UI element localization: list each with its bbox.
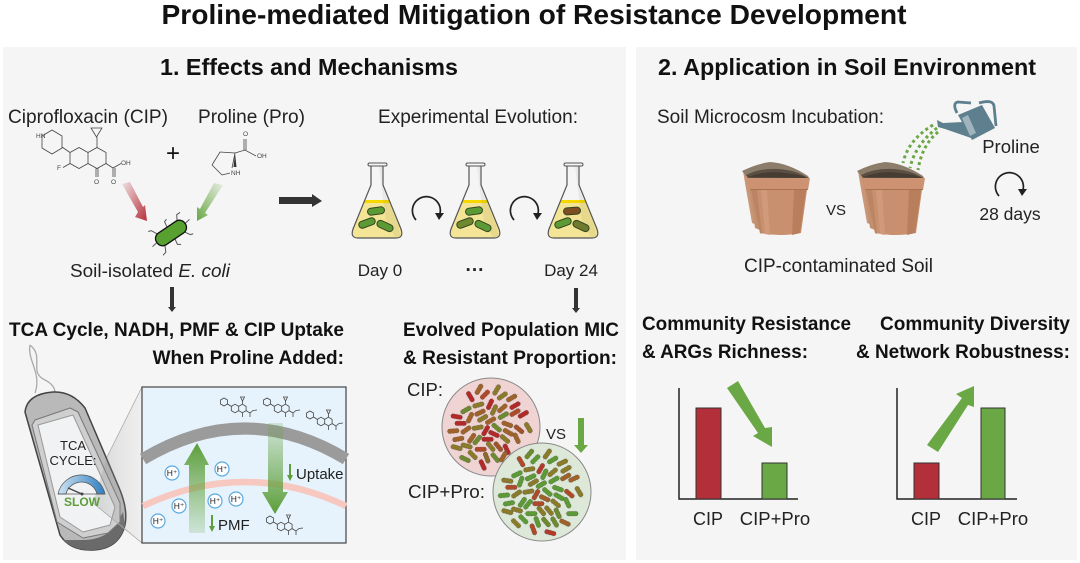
flask: middle [450,163,500,238]
arrow: cycle [412,197,444,220]
label: experimental evolution: Experimental Evolution: [378,107,578,128]
arrow: decrease [727,381,772,447]
heading: ARGs richness: & ARGs Richness: [642,342,808,363]
icon: ciprofloxacin molecule: F [57,165,61,172]
label: PMF [209,515,250,534]
label: PMF: PMF [218,517,250,534]
population: CIP [442,378,540,476]
zoom wedge [93,387,142,543]
label: day 24: Day 24 [544,261,598,280]
label: proline: Proline [982,136,1040,157]
population: CIP+Pro [493,443,591,541]
CIP molecules [220,397,343,535]
heading: TCA cycle: TCA Cycle, NADH, PMF & CIP Uptake [9,320,344,341]
arrow: to evolved population [572,288,580,313]
label: uptake: Uptake [296,466,344,483]
arrow: to TCA heading [168,287,176,312]
heading: network robustness: & Network Robustness: [856,342,1070,363]
arrow: cycle [510,197,542,220]
arrow: uptake down [262,423,288,514]
icon: proline molecule: O [243,131,248,138]
bar chart: diversity [897,386,1028,529]
icon: ciprofloxacin molecule: HN [36,133,46,140]
label: CIP [693,509,723,529]
panel: membrane zoom [142,387,346,543]
heading: effects and mechanisms: 1. Effects and Mechanisms [160,54,458,80]
label: CIP+Pro: CIP+Pro: [408,481,485,502]
arrow: increase [927,386,974,452]
icon: proline molecule: OH [257,153,267,160]
icon: pot with proline [857,162,925,235]
label: CIP [911,509,941,529]
heading: community diversity: Community Diversity [880,314,1070,335]
icon: E. coli bacterium [144,209,198,258]
label: proline: Proline (Pro) [198,107,305,128]
label: CIP: CIP: [407,379,443,400]
bar chart: resistance [679,381,810,529]
arrow: decrease [574,418,588,453]
label: soil-isolated E. coli: Soil-isolated E. coli [70,260,231,281]
label: vs: VS [826,202,846,219]
H+ ions [151,462,243,528]
icon: ciprofloxacin molecule: OH [121,160,131,167]
label: ciprofloxacin: Ciprofloxacin (CIP) [8,107,168,128]
label: contaminated soil: CIP-contaminated Soil [744,256,933,277]
label: CIP+Pro [740,508,810,529]
panel: application in soil environment [636,47,1077,560]
label: 28 days: 28 days [979,204,1041,224]
icon: ciprofloxacin molecule [36,128,131,186]
bar: CIP+Pro [981,408,1005,499]
arrow: CIP to E. coli [122,182,147,221]
arrow: cycle [995,173,1027,196]
text: TCA cycle: TCA [60,438,86,453]
icon: bacterial cell slow TCA: CYCLE: [50,453,96,468]
label: day 0: Day 0 [358,261,402,280]
label: CIP+Pro [958,508,1028,529]
arrow: to experimental evolution [279,194,322,207]
label: soil microcosm incubation: Soil Microcosm Incubation: [657,107,884,128]
icon: ciprofloxacin molecule: O [94,179,99,186]
plus sign: + [166,140,180,167]
heading: when proline added: When Proline Added: [153,348,344,369]
heading: application in soil: 2. Application in Soil Environment [658,54,1036,80]
panel: effects and mechanisms [3,47,626,560]
bar: CIP+Pro [762,463,787,499]
icon: proline molecule: NH [231,170,241,177]
icon: proline molecule [212,131,267,177]
icon: pot without proline [742,162,810,235]
icon: ciprofloxacin molecule: O [111,179,116,186]
heading: resistant proportion: & Resistant Proportion: [403,348,617,369]
bar: CIP [914,463,939,499]
flask: day 24 [548,163,598,238]
flask: day 0 [352,163,402,238]
icon: watering can [937,102,996,140]
ellipsis: ··· [466,260,484,281]
icon: bacterial cell slow TCA [25,345,142,550]
arrow: proline to E. coli [197,183,223,221]
arrow: PMF up [184,443,209,533]
icon: proline droplets [903,125,938,170]
gauge [58,475,105,496]
label: vs: VS [546,426,566,443]
heading: community resistance: Community Resistance [642,314,851,335]
bar: CIP [696,408,721,499]
heading: evolved population: Evolved Population MIC [403,320,619,341]
text: slow: SLOW [64,495,101,509]
